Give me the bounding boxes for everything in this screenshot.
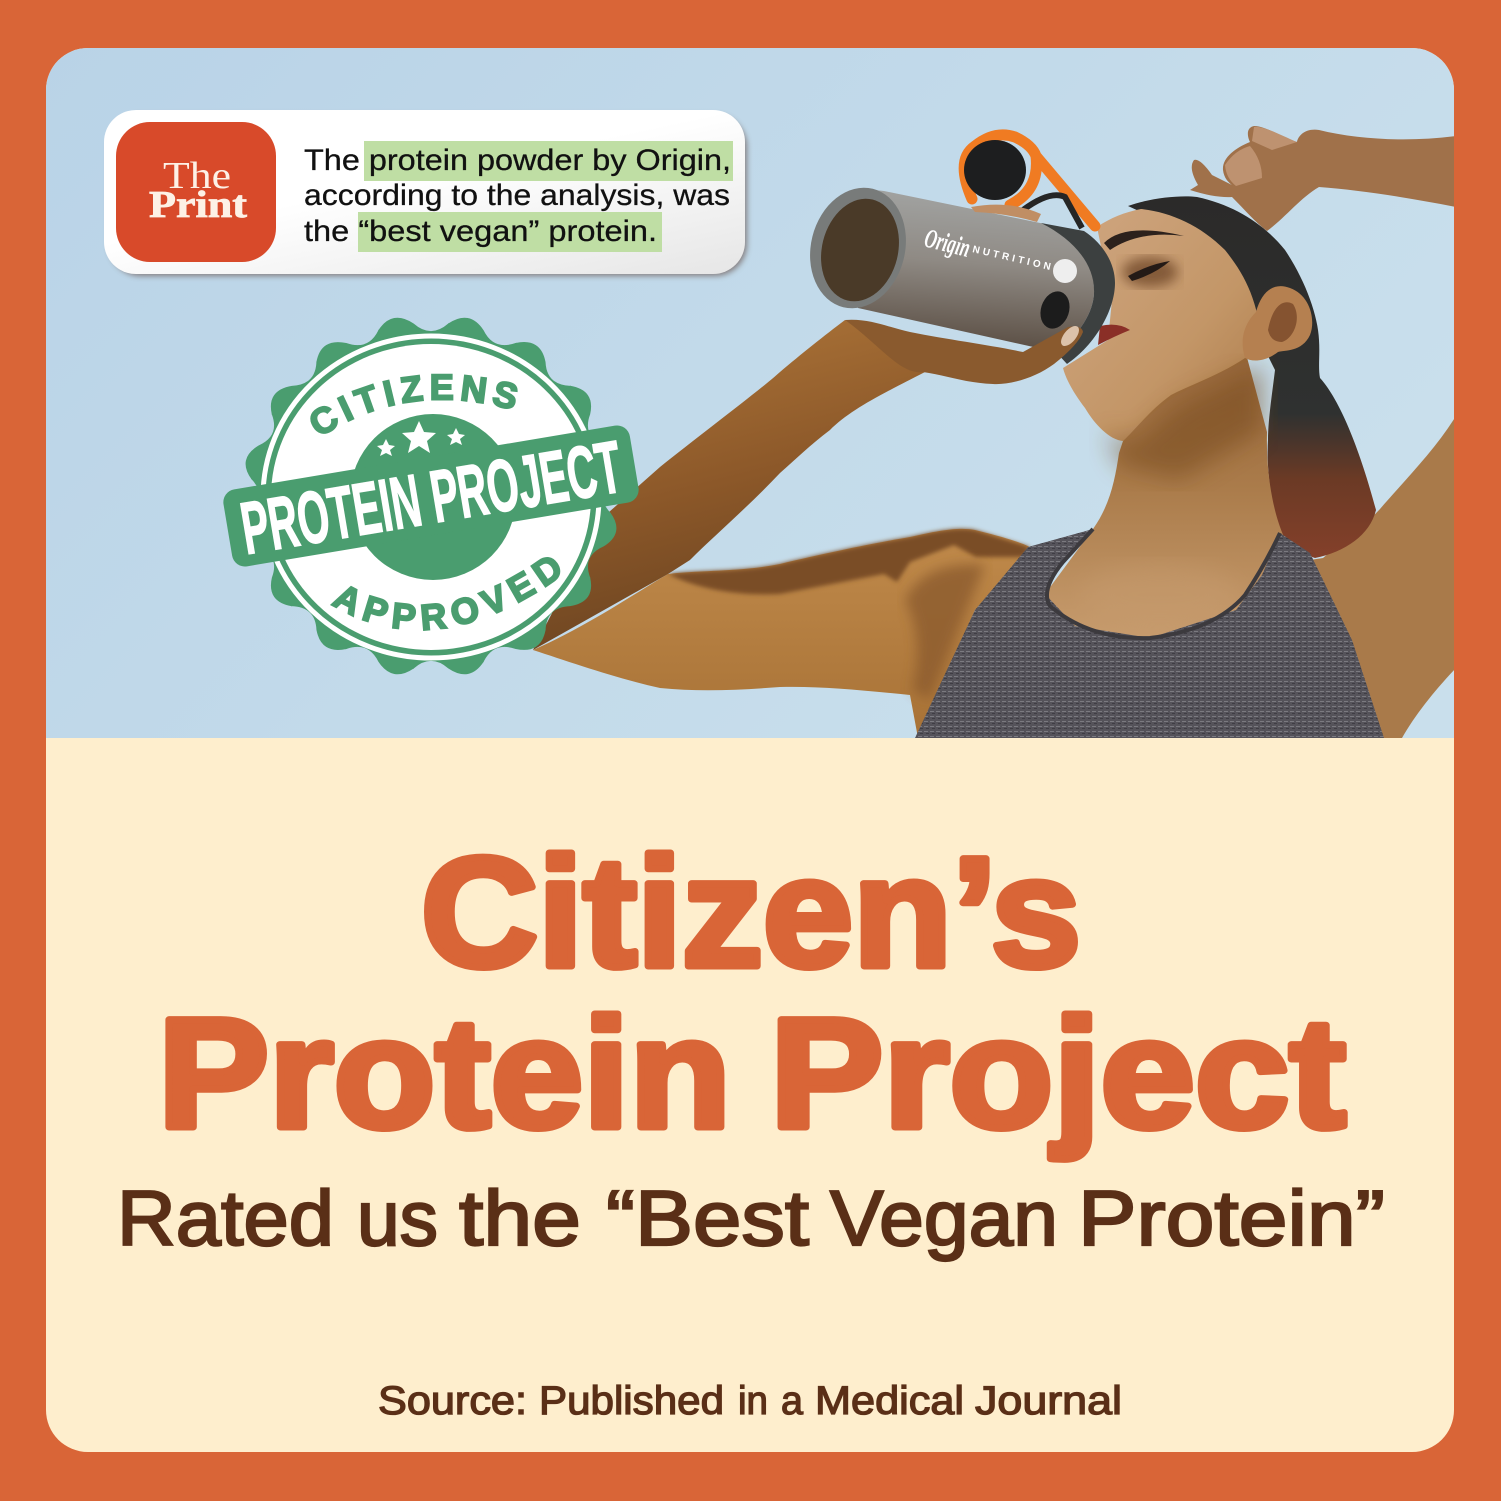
heading line 2 bbox=[158, 987, 1346, 1161]
source card: The Print bbox=[104, 110, 747, 276]
subheading: Vegan bbox=[830, 1174, 1058, 1262]
shaker cap bbox=[964, 140, 1026, 200]
subheading bbox=[117, 1174, 1385, 1262]
raised arm right bbox=[1310, 416, 1456, 738]
source line: Journal bbox=[975, 1379, 1122, 1423]
white disc bbox=[271, 344, 591, 650]
bottle branding: Origin bbox=[922, 223, 973, 263]
photo: woman drinking from shaker bbox=[533, 126, 1456, 738]
highlight 2 bbox=[358, 212, 662, 252]
stars bbox=[377, 421, 465, 456]
upper arm bbox=[533, 529, 1030, 738]
logo: The Print: The bbox=[163, 155, 231, 197]
fingers on top of bottle bbox=[971, 205, 1041, 222]
lips bbox=[1098, 325, 1130, 345]
neck and chest bbox=[1045, 350, 1284, 650]
ponytail and hair bbox=[1128, 196, 1376, 558]
forearm bbox=[533, 320, 925, 650]
heading line 2: Protein bbox=[158, 987, 731, 1161]
orange strap bbox=[964, 135, 1095, 226]
source line: in bbox=[738, 1379, 768, 1423]
face bbox=[1063, 209, 1262, 441]
raised forearm and hand bbox=[1190, 126, 1456, 231]
subheading: “Best bbox=[606, 1174, 809, 1262]
subheading: us bbox=[357, 1174, 438, 1262]
scalloped seal bbox=[213, 286, 649, 706]
bottle branding bbox=[924, 230, 1077, 283]
quote text bbox=[304, 144, 731, 248]
raised hand fingers highlight bbox=[1225, 127, 1297, 186]
subheading: the bbox=[459, 1174, 581, 1262]
shaker body bbox=[858, 189, 1094, 352]
hand gripping bottle bbox=[845, 320, 1083, 384]
armpit shadow bbox=[905, 564, 985, 700]
thumb nail bbox=[1061, 326, 1079, 346]
ribbon: PROTEIN PROJECT bbox=[235, 425, 627, 570]
sky background bbox=[46, 48, 1454, 738]
logo: The Print: Print bbox=[149, 184, 247, 226]
brand mark bbox=[1053, 259, 1077, 283]
heading line 2: Project bbox=[770, 987, 1346, 1161]
subheading: Protein” bbox=[1078, 1174, 1385, 1262]
card shadow bbox=[109, 115, 747, 276]
eyebrow bbox=[1104, 230, 1184, 250]
bottle sticker bbox=[1040, 291, 1070, 329]
shaker open end bbox=[810, 188, 906, 308]
badge: Citizens Approved bbox=[223, 318, 639, 674]
source line: Medical bbox=[815, 1379, 964, 1423]
upper arm shadow bbox=[668, 529, 1030, 594]
source line bbox=[378, 1379, 1122, 1423]
curved text: APPROVED: APPROVED bbox=[330, 557, 560, 631]
curved text: CITIZENS: CITIZENS bbox=[310, 374, 518, 434]
handle loop bbox=[1023, 195, 1082, 228]
highlight 1 bbox=[364, 141, 733, 181]
tank top bbox=[915, 529, 1384, 738]
closed eye lash bbox=[1128, 261, 1170, 281]
source line: Published bbox=[539, 1379, 724, 1423]
neckline trim bbox=[1047, 529, 1280, 638]
quote text: according to the analysis, was bbox=[304, 179, 730, 212]
bottle branding: NUTRITION bbox=[971, 244, 1052, 273]
source line: Source: bbox=[378, 1379, 527, 1423]
source line: a bbox=[781, 1379, 804, 1423]
chest highlight bbox=[1080, 563, 1240, 627]
card bbox=[104, 110, 745, 274]
ribbon bbox=[221, 423, 641, 572]
quote text: The protein powder by Origin, bbox=[304, 144, 731, 177]
shaker lid band bbox=[1041, 223, 1115, 364]
ear bbox=[1243, 286, 1312, 360]
subheading: Rated bbox=[117, 1174, 334, 1262]
eye shadow bbox=[1122, 257, 1178, 287]
quote text: the “best vegan” protein. bbox=[304, 215, 657, 248]
ring bbox=[263, 336, 599, 658]
heading line 1: Citizen’s bbox=[421, 826, 1081, 1000]
under-chin shadow bbox=[1105, 365, 1262, 480]
logo: The Print bbox=[116, 122, 276, 262]
green centre circle bbox=[350, 414, 516, 580]
